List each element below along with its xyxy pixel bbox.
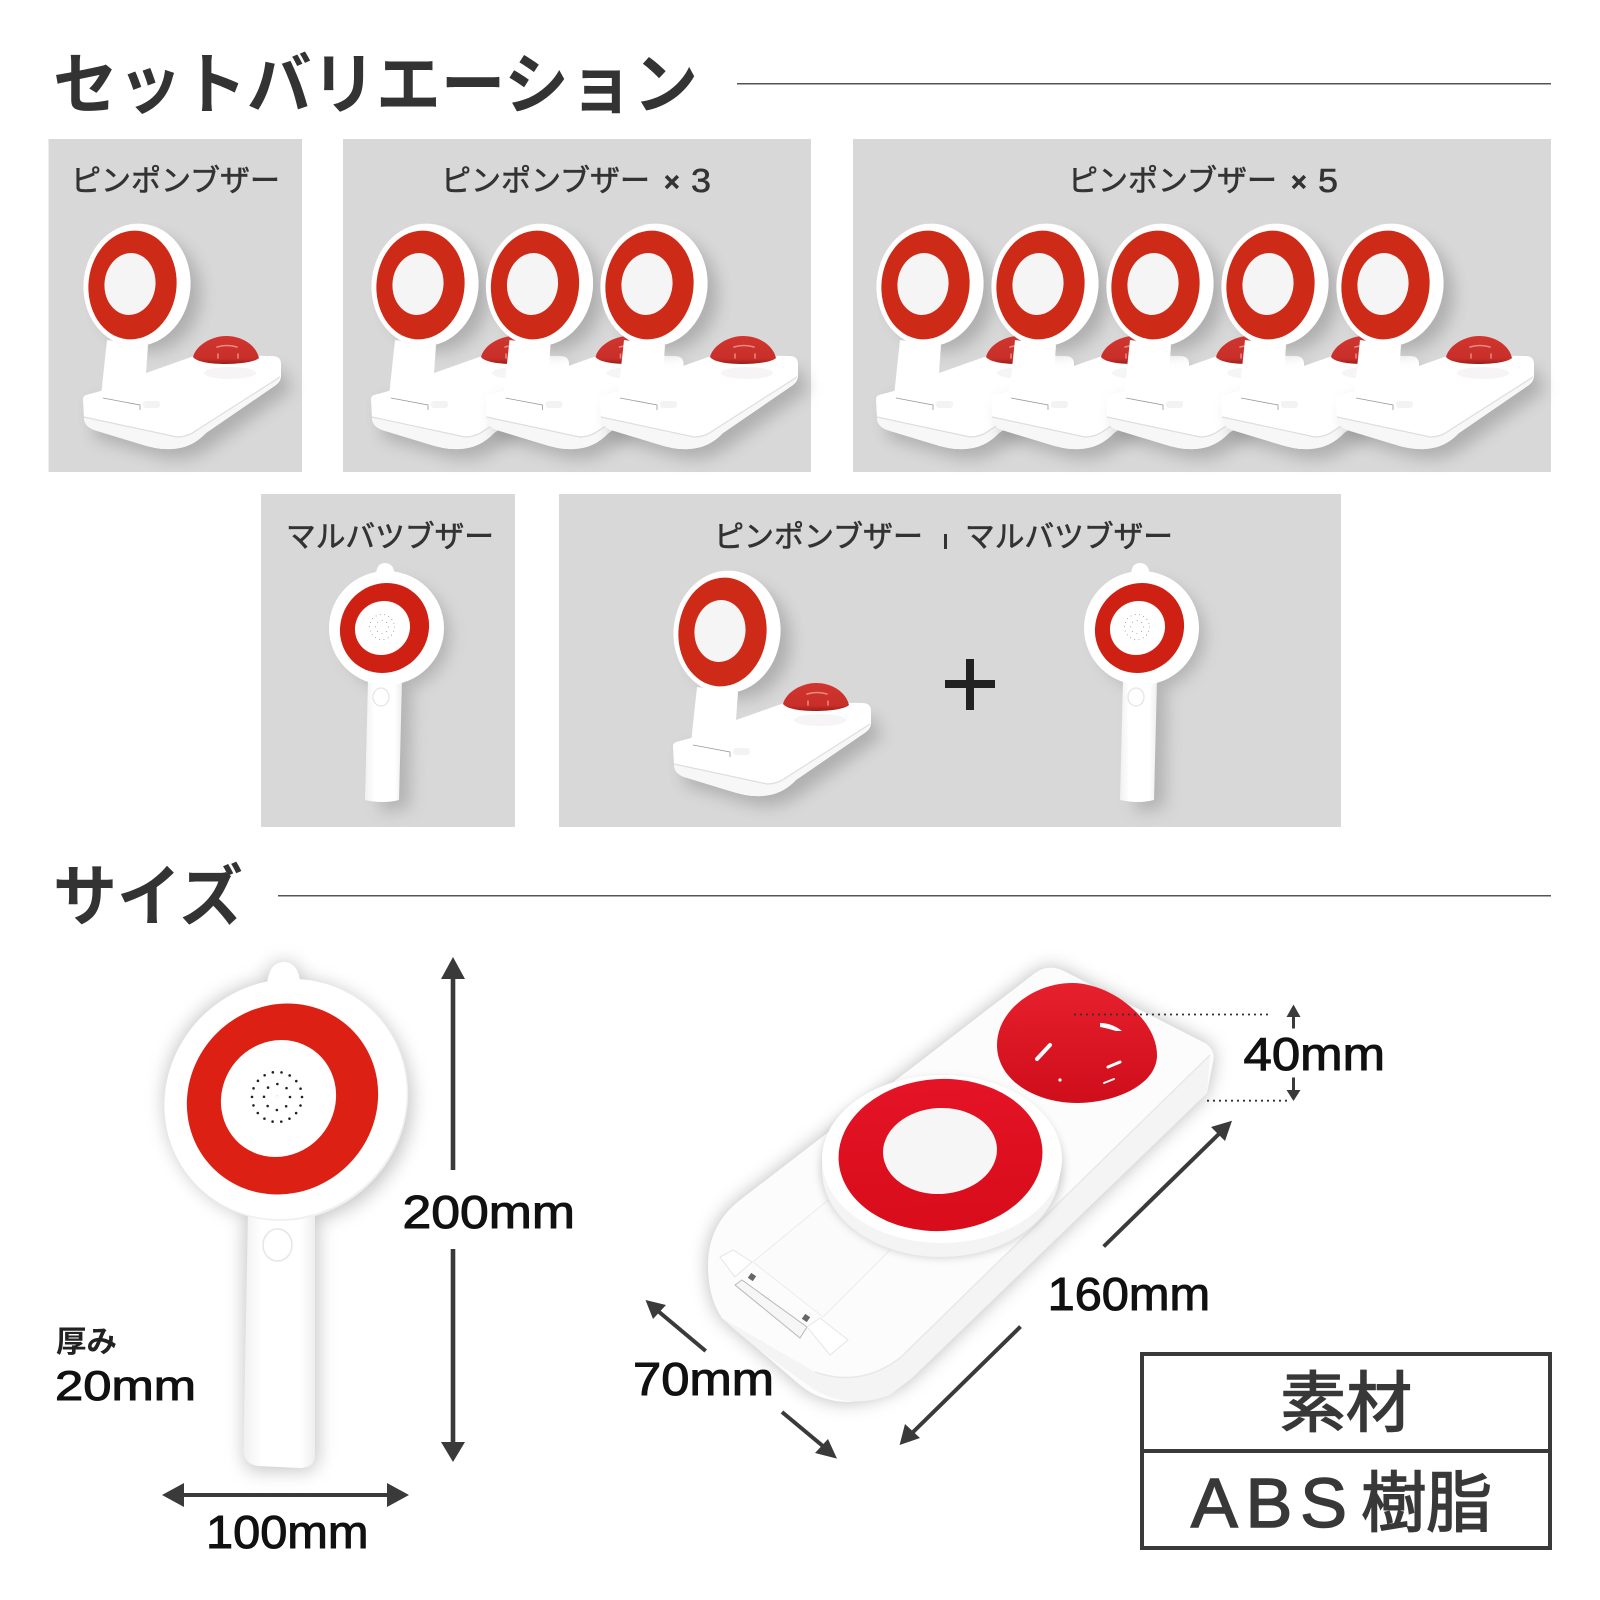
label: ping-pong and maru-batsu: ピンポンブザー: [714, 521, 923, 554]
product: maru-batsu buzzer: [329, 563, 450, 812]
product: maru-batsu buzzer: [1084, 563, 1205, 812]
paddle disc: [820, 1074, 1064, 1258]
product: large maru-batsu buzzer: [158, 962, 414, 1471]
arrow: width 100mm: [162, 1483, 409, 1507]
dimension: 100mm: 100mm: [206, 1506, 368, 1558]
label: ping-pong buzzer x5: 5: [1318, 162, 1338, 199]
material heading: 素材: [1280, 1366, 1412, 1440]
panel: ping-pong buzzer x3: [343, 139, 811, 472]
dimension: thickness 20mm: [55, 1326, 196, 1409]
label: ping-pong and maru-batsu: マルバツブザー: [965, 521, 1173, 554]
label: ping-pong and maru-batsu: [714, 521, 1173, 554]
product: three ping-pong buzzers: [365, 218, 809, 459]
dimension: thickness 20mm: 20mm: [55, 1362, 196, 1409]
dimension: width 70mm: [633, 1300, 837, 1459]
dimension: width 70mm: 70mm: [633, 1353, 774, 1405]
hinge: [720, 1250, 848, 1355]
material value: 樹脂: [1361, 1466, 1492, 1540]
dimension: 200mm: 200mm: [402, 1186, 575, 1238]
label: ping-pong buzzer x3: ×: [664, 167, 680, 197]
dimension: height 40mm: 40mm: [1244, 1028, 1385, 1080]
label: ping-pong buzzer x5: [1068, 162, 1338, 199]
icon: plus sign: [945, 659, 995, 710]
dimension: length 160mm: [900, 1121, 1232, 1445]
label: ping-pong buzzer x3: 3: [691, 162, 711, 199]
dome button: [997, 983, 1157, 1103]
label: maru-batsu buzzer: マルバツブザー: [286, 521, 494, 554]
product: five ping-pong buzzers: [870, 218, 1545, 459]
arrow: height 200mm: [441, 957, 465, 1462]
panel: ping-pong buzzer x5: [853, 139, 1551, 472]
label: ping-pong buzzer x5: ピンポンブザー: [1068, 165, 1277, 198]
material value: ABS: [1191, 1464, 1347, 1542]
dimension: thickness 20mm: 厚み: [56, 1326, 117, 1359]
dimension: height 40mm: [1074, 1004, 1385, 1101]
dimension: length 160mm: 160mm: [1048, 1268, 1210, 1320]
panel: single ping-pong buzzer: [48, 139, 302, 472]
label: ping-pong buzzer x3: [441, 162, 711, 199]
material table: [1142, 1354, 1550, 1548]
stem: [753, 1200, 893, 1317]
label: ping-pong buzzer x5: ×: [1291, 167, 1307, 197]
material value: [1191, 1464, 1492, 1542]
product: ping-pong buzzer: [77, 218, 292, 459]
label: ping-pong buzzer x3: ピンポンブザー: [441, 165, 650, 198]
title: set variations: セットバリエーション: [53, 48, 698, 123]
product: ping-pong buzzer: [667, 565, 882, 806]
panel: maru-batsu buzzer: [261, 494, 515, 827]
panel: ping-pong plus maru-batsu: [559, 494, 1341, 827]
title: size: サイズ: [53, 860, 243, 935]
label: ping-pong buzzer: ピンポンブザー: [71, 165, 280, 198]
product: buzzer top view: [708, 968, 1214, 1402]
